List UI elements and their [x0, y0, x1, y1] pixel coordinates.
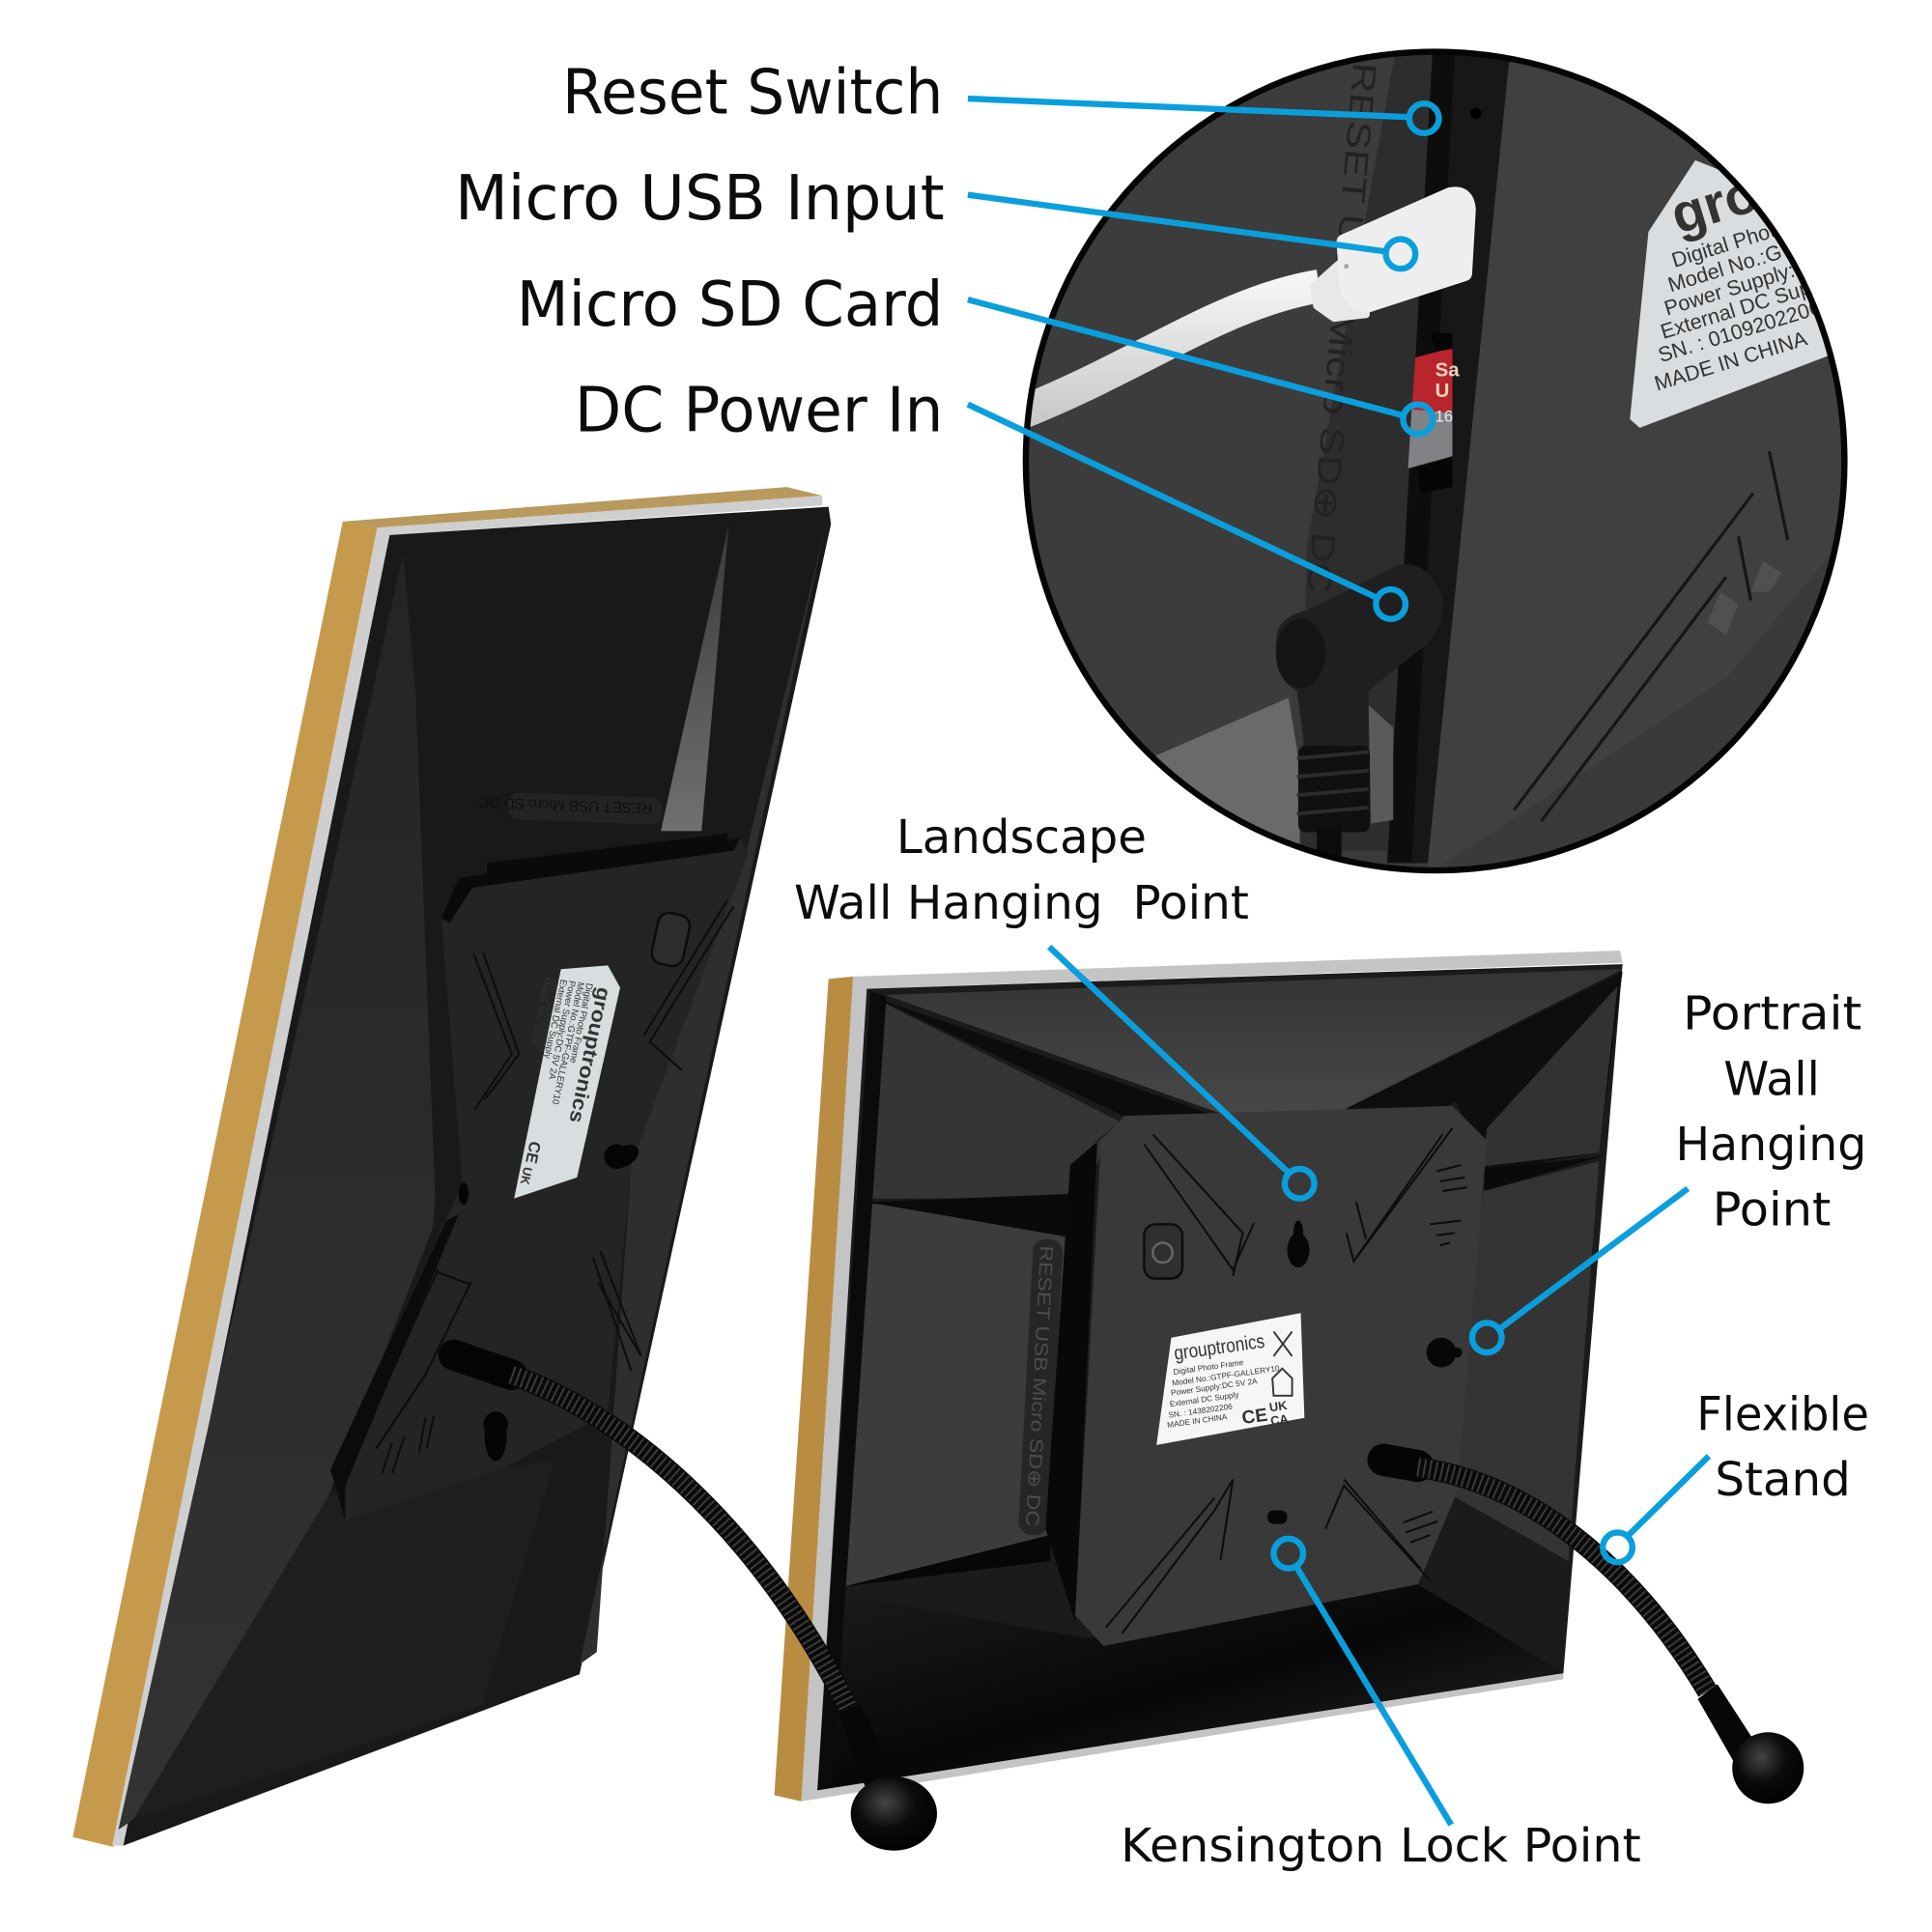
frame back [124, 507, 831, 1846]
product sticker: CA [1269, 1411, 1290, 1428]
product sticker: SN. : 1438202206 [534, 978, 560, 1052]
product sticker: Digital Photo Frame [1173, 1357, 1244, 1377]
product sticker [1156, 1313, 1304, 1445]
product sticker: UK [518, 1166, 535, 1187]
callout: flexible stand [1603, 1388, 1869, 1562]
callout: portrait wall hanging point [1472, 987, 1866, 1352]
embossed port labels: RESET USB Micro SD⊕ DC [1021, 1245, 1056, 1527]
grey base [1155, 697, 1300, 844]
product label: MADE IN CHINA [1652, 326, 1810, 395]
embossed port text: RESET USB Micro SD⊕ DC [1299, 61, 1382, 595]
product sticker: grouptronics [1173, 1331, 1266, 1365]
callout: flexible stand: Flexible [1696, 1388, 1869, 1442]
micro SD card: Sa [1435, 359, 1460, 381]
embossed port labels [1018, 1238, 1064, 1536]
kensington lock slot [1267, 1510, 1287, 1524]
flexible stand gooseneck, right [1383, 1460, 1804, 1804]
callout: landscape wall hanging point: Landscape [896, 810, 1147, 865]
product label: Digital Photo Frame [1668, 195, 1853, 272]
embossed chevrons [1144, 1134, 1254, 1276]
circle border [1026, 52, 1844, 870]
product label: Power Supply:DC 5V [1662, 240, 1857, 321]
callout: kensington lock point: Kensington Lock Point [1121, 1819, 1641, 1873]
product sticker: MADE IN CHINA [1167, 1411, 1228, 1430]
product sticker: UK [1268, 1398, 1289, 1414]
callout: portrait wall hanging point: Hanging [1676, 1118, 1866, 1172]
callout: reset switch [562, 57, 1438, 133]
embossed port labels: RESET USB Micro SD DC [478, 794, 652, 816]
side wall [1011, 37, 1400, 863]
power button [650, 911, 692, 968]
product sticker: Model No.:GTPF-GALLERY10 [550, 980, 585, 1105]
product label [1630, 160, 1828, 428]
callout: portrait wall hanging point: Point [1713, 1183, 1831, 1237]
frame back [817, 964, 1623, 1790]
mount plate [330, 838, 749, 1520]
micro SD card: U [1435, 381, 1449, 402]
USB plug [1315, 194, 1468, 318]
callout: portrait wall hanging point: Wall [1723, 1052, 1820, 1106]
callout: DC power in [575, 376, 1406, 619]
product sticker: CE [1240, 1406, 1269, 1429]
reset pinhole [1470, 108, 1482, 119]
flexible stand gooseneck, left frame [454, 1355, 937, 1851]
panel: right frame, rear view [775, 951, 1804, 1804]
product sticker: SN. : 1438202206 [1168, 1402, 1234, 1420]
power button [1144, 1224, 1182, 1279]
product label: External DC Supply [1658, 267, 1839, 344]
callout: flexible stand: Stand [1715, 1453, 1851, 1507]
product sticker [514, 965, 620, 1199]
callout: micro USB input: Micro USB Input [455, 163, 945, 235]
product sticker: Digital Photo Frame [567, 982, 594, 1065]
callout: micro SD card [517, 270, 1433, 434]
right panel [1428, 62, 1518, 864]
callout: DC power in: DC Power In [575, 376, 943, 447]
embossed chevrons [473, 953, 519, 1110]
white USB cable [1011, 286, 1320, 416]
callout: portrait wall hanging point: Portrait [1683, 987, 1861, 1041]
callout: reset switch: Reset Switch [562, 57, 943, 128]
portrait keyhole [1427, 1338, 1463, 1367]
product sticker: grouptronics [564, 985, 614, 1124]
callout: kensington lock point [1121, 1539, 1641, 1873]
embossed port labels [478, 791, 663, 825]
product sticker: Power Supply:DC 5V 2A [1170, 1376, 1259, 1398]
callout: micro SD card: Micro SD Card [517, 270, 943, 341]
DC plug [1275, 564, 1428, 856]
product label: grou [1663, 152, 1797, 245]
product label: SN. : 0109202206 [1655, 295, 1824, 367]
embossed chevron grooves [1514, 451, 1788, 821]
product sticker: External DC Supply [1169, 1389, 1240, 1408]
callout: landscape wall hanging point [794, 810, 1315, 1199]
product sticker: Model No.:GTPF-GALLERY10 [1172, 1363, 1281, 1388]
product sticker: MADE IN CHINA [527, 976, 553, 1047]
product sticker: Power Supply:DC 5V 2A [546, 980, 577, 1081]
callout: micro USB input [455, 163, 1415, 269]
product sticker: External DC Supply [541, 979, 569, 1060]
product label: Model No.:GTPF-GALLERY [1665, 198, 1921, 297]
micro SD card [1408, 333, 1460, 494]
black port strip [1387, 54, 1455, 864]
gold frame edge [775, 977, 853, 1802]
landscape keyhole [1287, 1221, 1309, 1267]
callout: landscape wall hanging point: Wall Hanging Point [794, 876, 1249, 930]
mount plate [1075, 1106, 1487, 1646]
panel: port close-up circle [1022, 48, 1848, 873]
micro SD card: 16 [1435, 408, 1453, 426]
product sticker: CE [522, 1140, 544, 1165]
gold frame edge [72, 522, 378, 1847]
panel: left frame, standing view [72, 487, 831, 1847]
keyhole points [459, 1140, 642, 1461]
